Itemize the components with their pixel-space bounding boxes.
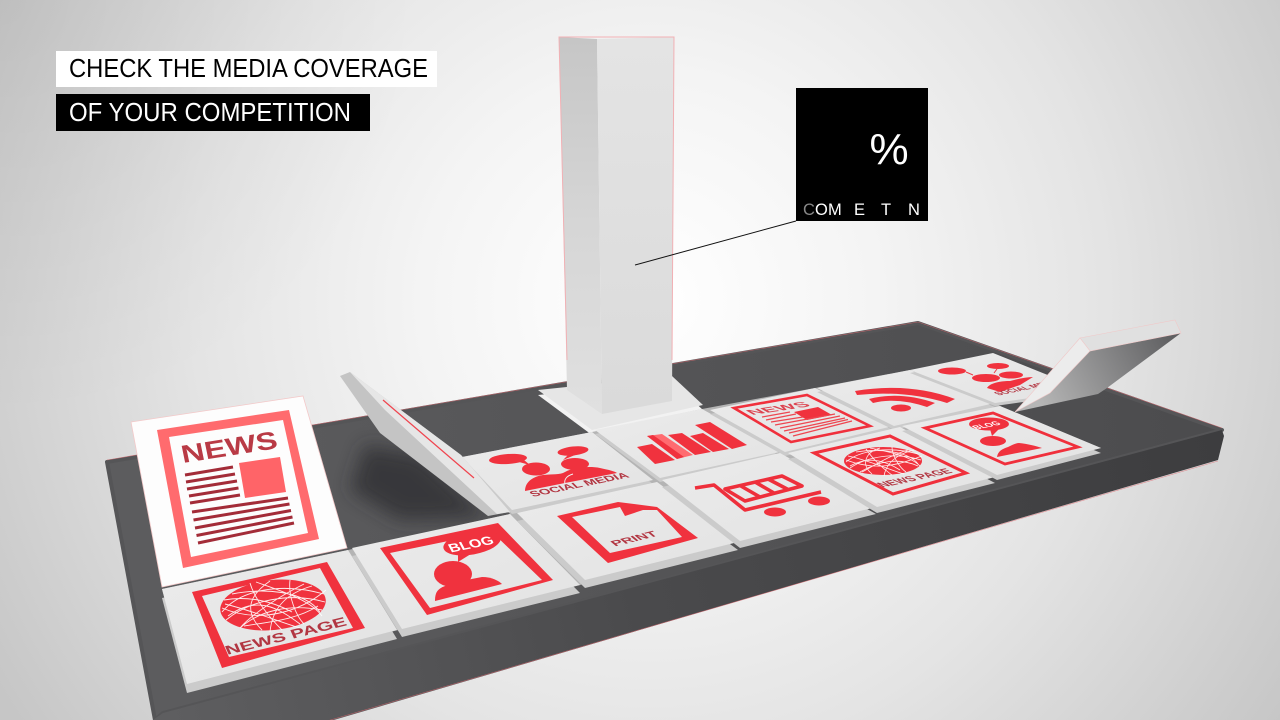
icon: news page (192, 562, 365, 668)
tile: news page, front row (162, 550, 397, 693)
icon: blog: BLOG (445, 533, 496, 555)
tilted tile, left (340, 372, 510, 516)
title line 2: OF YOUR COMPETITION (69, 97, 351, 127)
leader line (635, 221, 796, 265)
title (56, 51, 437, 131)
tile: blog, right (902, 406, 1101, 480)
icon: social media small: SOCIAL MEDIA (992, 379, 1065, 397)
callout: competition percentage: COM E T N (803, 201, 920, 219)
icon: news page: NEWS PAGE (223, 614, 349, 657)
callout: competition percentage (796, 88, 928, 221)
tile: social media, back row (462, 432, 653, 514)
icon: social media (489, 445, 633, 499)
icon: bars (637, 422, 747, 464)
tilted tile, right (1015, 320, 1181, 412)
icon: newspaper small (734, 395, 870, 442)
standing news tile (131, 396, 347, 587)
icon: large newspaper (157, 410, 319, 568)
icon: large newspaper: NEWS (179, 426, 280, 469)
tile: shopping cart (662, 453, 876, 548)
column (559, 37, 674, 414)
callout: competition percentage: % (869, 125, 909, 174)
icon: news page small: NEWS PAGE (873, 467, 956, 489)
icon: rss (855, 388, 955, 412)
tile: news, back row (710, 388, 893, 456)
icon: blog (380, 523, 553, 615)
shadow of tilted tile (350, 445, 488, 520)
icon: social media small (938, 363, 1065, 397)
tile: blog, front row (352, 514, 580, 637)
column base tile (538, 376, 703, 435)
icon: blog small (925, 413, 1078, 464)
icon: print document: PRINT (608, 529, 661, 548)
icon: print document (557, 502, 698, 563)
platform slab (107, 322, 1224, 720)
icon: cart (695, 476, 830, 516)
icon: blog small: BLOG (970, 420, 1004, 431)
tile: news page, right (788, 427, 995, 513)
icon: newspaper small: NEWS (743, 401, 815, 417)
title line 1: CHECK THE MEDIA COVERAGE (69, 53, 428, 83)
icon: news page small (814, 436, 966, 494)
tile: social media, far corner (910, 353, 1085, 406)
icon: social media: SOCIAL MEDIA (527, 471, 633, 499)
tile: print (517, 482, 738, 588)
tile bed underlay (162, 370, 1101, 684)
tile: rss (817, 370, 995, 430)
tile: bar chart (595, 409, 780, 482)
